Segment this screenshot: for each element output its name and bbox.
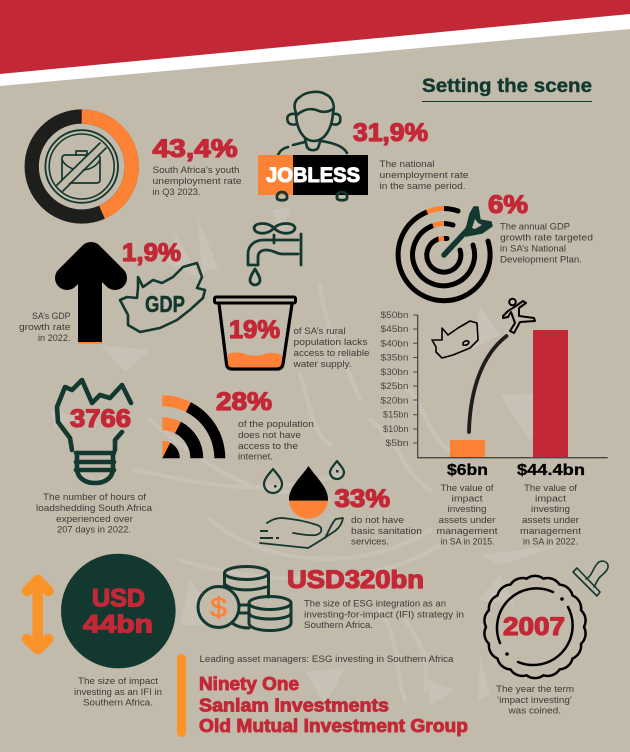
stat: 31,9%: in the same period. bbox=[380, 181, 466, 192]
stat: USD320bn: The size of ESG integration as an bbox=[304, 599, 446, 610]
icon: South Africa map with GDP bbox=[120, 263, 205, 332]
caption: 2007 bbox=[496, 684, 574, 716]
header band bbox=[0, 0, 630, 86]
stat: 19%: population lacks bbox=[294, 337, 368, 348]
chart axis labels: $25bn bbox=[380, 381, 408, 391]
stat: 6%: 6% bbox=[488, 191, 528, 219]
stat: 28%: 28% bbox=[216, 388, 272, 416]
stat: 3766: 3766 bbox=[70, 405, 131, 433]
stat: 19%: access to reliable bbox=[294, 348, 370, 359]
title: Setting the scene: Setting the scene bbox=[422, 75, 592, 97]
caption: 2015: The value of bbox=[440, 483, 494, 494]
stat: 31,9% bbox=[353, 119, 468, 192]
icon: target with arrow bbox=[398, 207, 492, 301]
stat: 33%: 33% bbox=[334, 485, 390, 513]
chart axis labels: $45bn bbox=[380, 324, 408, 334]
icon: drops and hand bbox=[260, 461, 344, 548]
caption: 2007: The year the term bbox=[496, 684, 574, 695]
stat: 1,9%: SA’s GDP bbox=[32, 311, 70, 322]
icon: bucket bbox=[214, 297, 296, 369]
stat: 33% bbox=[334, 485, 422, 548]
caption: USD 44bn bbox=[74, 676, 162, 708]
icon: up arrow bbox=[67, 254, 115, 344]
stat: 3766: 207 days in 2022. bbox=[57, 524, 131, 536]
icon: stamp bbox=[573, 561, 608, 596]
stat: 3766: The number of hours of bbox=[43, 492, 146, 503]
stat: USD320bn bbox=[287, 566, 464, 631]
stat: USD320bn: investing-for-impact (IFI) strategy in bbox=[304, 610, 464, 620]
caption: 2007: ‘impact investing’ bbox=[497, 695, 572, 706]
stat: 28%: access to the bbox=[238, 441, 298, 452]
stat: 19%: 19% bbox=[229, 316, 280, 344]
icon: seal bbox=[484, 576, 586, 678]
chart axis labels: $10bn bbox=[383, 424, 408, 434]
stat: 33%: do not have bbox=[351, 515, 404, 526]
icon: seal: 2007 bbox=[503, 613, 565, 641]
icon: wifi signal bbox=[162, 395, 225, 458]
chart axis labels: $35bn bbox=[380, 352, 408, 362]
stat: USD320bn: USD320bn bbox=[287, 566, 424, 594]
list: leading asset managers: Ninety One bbox=[199, 674, 299, 694]
caption: USD 44bn: Southern Africa. bbox=[83, 698, 153, 708]
caption: 2022: The value of bbox=[524, 483, 577, 494]
icon: jobless person: JOBLESS bbox=[266, 164, 360, 187]
stat: 28%: internet. bbox=[238, 452, 273, 462]
stat: 28%: does not have bbox=[238, 430, 301, 441]
stat: 3766: loadshedding South Africa bbox=[36, 503, 153, 514]
bar chart: impact investing assets bbox=[380, 299, 608, 548]
bar: 2022 bbox=[533, 330, 568, 457]
stat: 6%: growth rate targeted bbox=[500, 232, 593, 244]
stat: 28%: of the population bbox=[238, 419, 314, 430]
stat: 43,4%: unemployment rate bbox=[152, 176, 242, 187]
value: $6bn: $6bn bbox=[447, 462, 488, 479]
stat: 43,4%: South Africa’s youth bbox=[152, 165, 240, 176]
caption: 2007: was coined. bbox=[507, 706, 561, 716]
list: leading asset managers: Leading asset managers: ESG investing in Southern Africa bbox=[200, 654, 454, 665]
caption: 2022 bbox=[520, 483, 581, 548]
icon: coins: $ bbox=[210, 592, 227, 623]
stat: 43,4%: 43,4% bbox=[152, 135, 238, 163]
caption: 2015 bbox=[436, 483, 498, 548]
stat: USD320bn: Southern Africa. bbox=[304, 620, 373, 631]
chart axis labels: $20bn bbox=[380, 396, 408, 406]
chart axis labels: $30bn bbox=[380, 367, 408, 377]
chart axes bbox=[413, 315, 608, 458]
stat: 1,9%: growth rate bbox=[19, 322, 70, 333]
caption: 2015: investing bbox=[448, 504, 486, 515]
icon: leaping figure bbox=[503, 299, 535, 333]
caption: 2015: management bbox=[436, 526, 498, 537]
stat: 43,4%: in Q3 2023. bbox=[152, 187, 200, 198]
chart axis labels: $15bn bbox=[383, 410, 408, 420]
stat: 33%: basic sanitation bbox=[351, 526, 422, 537]
caption: 2015: assets under bbox=[438, 515, 496, 526]
caption: USD 44bn: The size of impact bbox=[78, 676, 158, 687]
growth curve bbox=[469, 336, 506, 432]
stat: 19%: of SA’s rural bbox=[294, 326, 346, 337]
value: $44.4bn: $44.4bn bbox=[517, 462, 585, 479]
stat: 31,9%: The national bbox=[380, 159, 434, 170]
bar: 2015 bbox=[450, 440, 485, 457]
icon: South Africa map small bbox=[432, 321, 478, 358]
stat: 6%: Development Plan. bbox=[500, 254, 582, 266]
list: leading asset managers bbox=[199, 654, 468, 736]
stat: 1,9%: in 2022. bbox=[38, 333, 70, 344]
icon: tap and drop bbox=[248, 224, 301, 285]
icon: South Africa map with GDP: GDP bbox=[145, 291, 185, 317]
list: leading asset managers: Sanlam Investments bbox=[199, 696, 389, 716]
circle: USD 44bn: USD bbox=[92, 585, 145, 613]
stat: 6%: in SA’s National bbox=[500, 244, 566, 254]
chart axis labels: $5bn bbox=[386, 438, 408, 448]
chart axis labels: $50bn bbox=[380, 310, 408, 320]
divider bar: asset managers bbox=[177, 654, 186, 737]
caption: 2022: in SA in 2022. bbox=[523, 536, 578, 548]
caption: 2015: impact bbox=[452, 494, 483, 504]
stat: 1,9%: 1,9% bbox=[122, 239, 181, 267]
caption: 2022: assets under bbox=[522, 515, 579, 526]
caption: USD 44bn: investing as an IFI in bbox=[74, 687, 162, 698]
list: leading asset managers: Old Mutual Investment Group bbox=[199, 716, 468, 736]
chart axis labels: $40bn bbox=[380, 338, 408, 348]
caption: 2022: investing bbox=[531, 504, 570, 515]
caption: 2022: impact bbox=[535, 494, 566, 504]
stat: 6% bbox=[488, 191, 593, 266]
icon: double arrow bbox=[27, 580, 48, 649]
chart axis labels bbox=[380, 310, 408, 448]
stat: 28% bbox=[216, 388, 314, 462]
donut: youth unemployment bbox=[32, 116, 132, 216]
caption: 2022: management bbox=[520, 526, 581, 537]
stat: 43,4% bbox=[152, 135, 242, 198]
icon: coins bbox=[198, 566, 291, 630]
stat: 1,9% bbox=[19, 239, 181, 344]
stat: 3766 bbox=[36, 405, 153, 536]
stat: 6%: The annual GDP bbox=[500, 222, 570, 232]
stat: 3766: experienced over bbox=[56, 514, 133, 525]
stat: 31,9%: unemployment rate bbox=[380, 170, 468, 181]
stat: 33%: services. bbox=[351, 536, 389, 548]
stat: 19% bbox=[229, 316, 370, 370]
circle: USD 44bn: 44bn bbox=[83, 611, 153, 639]
circle: USD 44bn bbox=[61, 554, 176, 668]
caption: 2015: in SA in 2015. bbox=[440, 536, 494, 548]
icon: broken light bulb bbox=[57, 380, 131, 483]
icon: jobless person bbox=[258, 92, 368, 200]
stat: 19%: water supply. bbox=[292, 359, 352, 370]
stat: 31,9%: 31,9% bbox=[353, 119, 428, 147]
